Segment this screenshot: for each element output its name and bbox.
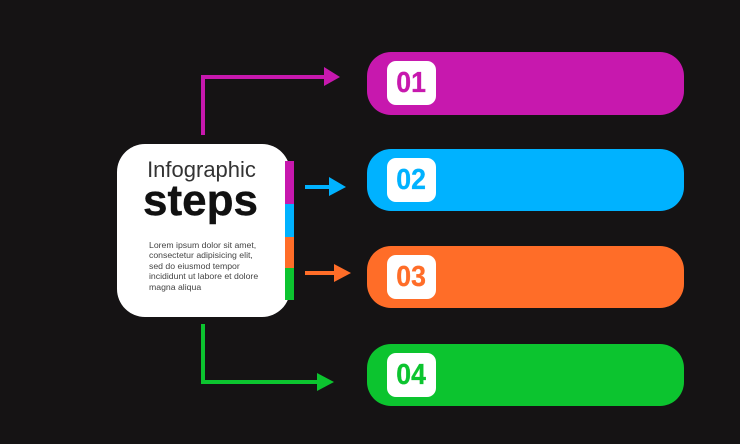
number 01: 01 xyxy=(397,67,426,99)
step 04 bar xyxy=(367,344,684,406)
colour strip xyxy=(285,161,294,300)
body text: magna aliqua xyxy=(149,282,201,292)
body text: sed do eiusmod tempor xyxy=(149,261,240,271)
step 01 bar xyxy=(367,52,684,115)
body text: incididunt ut labore et dolore xyxy=(149,271,258,281)
step 03 bar xyxy=(367,246,684,308)
arrow: to step 04 xyxy=(203,324,334,391)
arrow: to step 03 xyxy=(305,264,351,282)
number 04: 04 xyxy=(397,359,426,391)
arrow: to step 02 xyxy=(305,177,346,196)
body text: consectetur adipisicing elit, xyxy=(149,250,253,260)
step 02 bar xyxy=(367,149,684,211)
panel: intro card xyxy=(117,144,290,317)
number 03 xyxy=(387,255,436,299)
heading: Infographic: Infographic xyxy=(147,157,256,182)
body text: Lorem ipsum dolor sit amet, xyxy=(149,240,256,250)
number 02 xyxy=(387,158,436,202)
number 04 xyxy=(387,353,436,397)
number 03: 03 xyxy=(397,261,426,293)
number 01 xyxy=(387,61,436,105)
body text xyxy=(149,240,258,292)
number 02: 02 xyxy=(397,164,426,196)
arrow: to step 01 xyxy=(203,67,340,135)
heading: steps: steps xyxy=(143,176,258,225)
